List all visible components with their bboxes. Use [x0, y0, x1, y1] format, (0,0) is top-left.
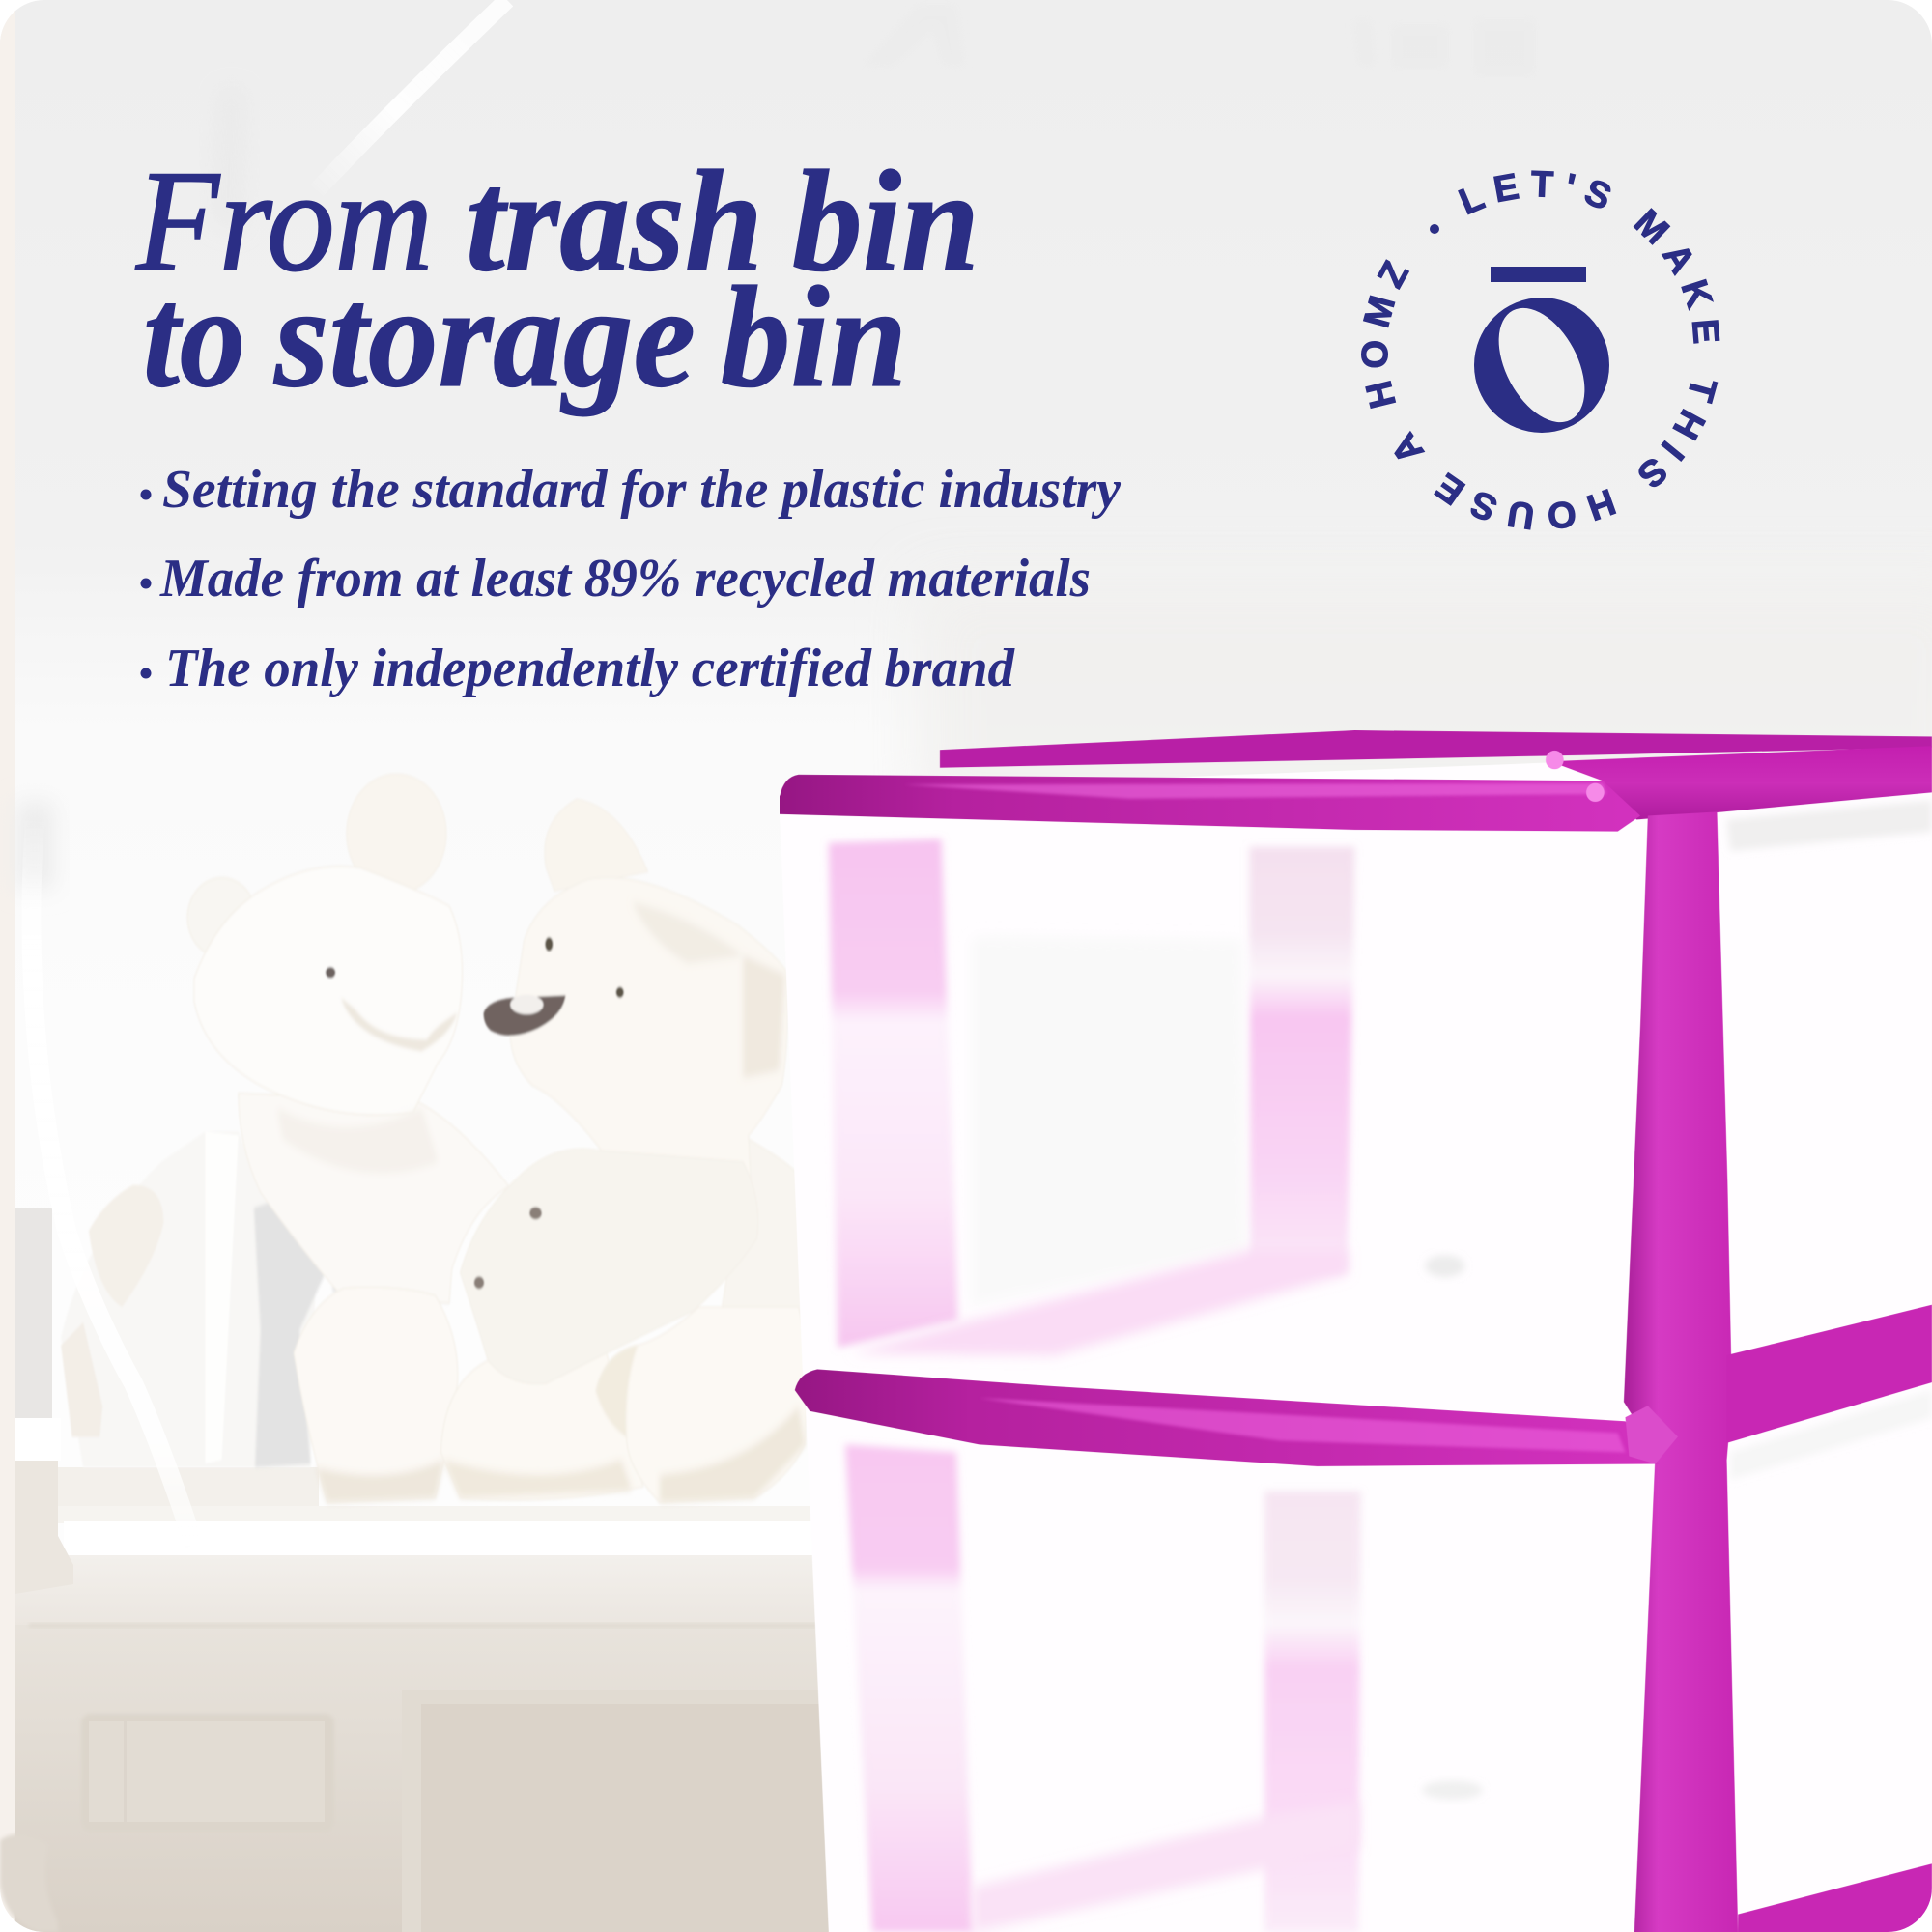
right top rim: [1550, 746, 1932, 819]
middle rim front: [795, 1369, 1659, 1466]
right bear nose: [484, 995, 565, 1036]
ring text: LET'S MAKE THIS HOUSE A HOMZ: [1361, 170, 1719, 530]
soft smudge upper left: [213, 87, 246, 232]
right bear eyes: [545, 937, 624, 998]
front top rim: [780, 751, 1640, 832]
bottom left blob: [0, 1833, 15, 1920]
bullet three: The only independently certified brand: [165, 639, 1015, 698]
counter top: [58, 1506, 831, 1523]
right bear: [440, 799, 806, 1503]
title: bin: [792, 141, 980, 301]
title: to: [143, 257, 245, 417]
right bear lower body: [440, 1346, 643, 1500]
left bear torso: [239, 1094, 509, 1303]
left bear leg: [294, 1287, 458, 1503]
right bear ear: [545, 799, 647, 891]
post junction: [1625, 1406, 1678, 1463]
ring dot: [1430, 224, 1439, 234]
wall smudge left: [17, 806, 52, 884]
cabinet top band: [15, 1555, 837, 1627]
upper drawer inner reflection: [829, 839, 1354, 1355]
title: bin: [721, 257, 907, 417]
left bear head: [194, 867, 463, 1115]
title: From: [135, 141, 433, 301]
cabinet left blob: [15, 1461, 73, 1594]
logo macron bar: [1491, 267, 1586, 282]
bullet two: Made from at least 89% recycled materials: [159, 549, 1091, 609]
left bear eye: [326, 967, 335, 978]
cabinet door: [402, 1690, 837, 1932]
right side panel shading: [1727, 800, 1932, 1480]
title: [135, 141, 980, 417]
left bear muzzle shade: [341, 998, 458, 1051]
left edge strip: [0, 607, 15, 1920]
bottom right rim: [1738, 1863, 1932, 1932]
lower drawer inner reflection: [845, 1255, 1483, 1932]
left bear: [187, 774, 509, 1503]
wall shading upper right: [935, 650, 1932, 777]
cabinet body: [15, 1625, 837, 1932]
drawer body: [780, 746, 1932, 1932]
circular logo badge: [1361, 170, 1719, 530]
right bear back: [721, 1139, 804, 1315]
title: storage: [273, 257, 696, 417]
left bear ears: [187, 877, 251, 952]
white block at left: [15, 1418, 52, 1420]
right bear head: [510, 877, 787, 1192]
vertical post: [1624, 811, 1738, 1932]
translucent plastic bag: [61, 1184, 336, 1467]
teddy bears: [61, 774, 806, 1503]
title: trash: [466, 141, 763, 301]
hippo eyes: [474, 1208, 542, 1289]
dresser and shelf scene: [0, 802, 840, 1932]
logo counter: [1481, 294, 1603, 437]
background wall: [15, 0, 1932, 668]
faint ghost marks at top: [860, 5, 1536, 77]
bullet list: [141, 460, 1122, 698]
small shelf tray: [58, 1467, 319, 1506]
bullet one: Setting the standard for the plastic industry: [162, 460, 1122, 520]
logo disc: [1474, 298, 1609, 433]
right bear leg: [596, 1307, 806, 1503]
hippo shaped toy head: [460, 1149, 758, 1384]
cabinet groove: [31, 1623, 815, 1625]
back top rim: [940, 730, 1932, 768]
counter front: [64, 1521, 810, 1523]
window at left: [15, 1208, 52, 1420]
white ring arc: [31, 0, 507, 1546]
plastic storage drawers: [780, 730, 1932, 1932]
cabinet drawer front: [83, 1716, 332, 1754]
middle rim right: [1727, 1305, 1932, 1443]
